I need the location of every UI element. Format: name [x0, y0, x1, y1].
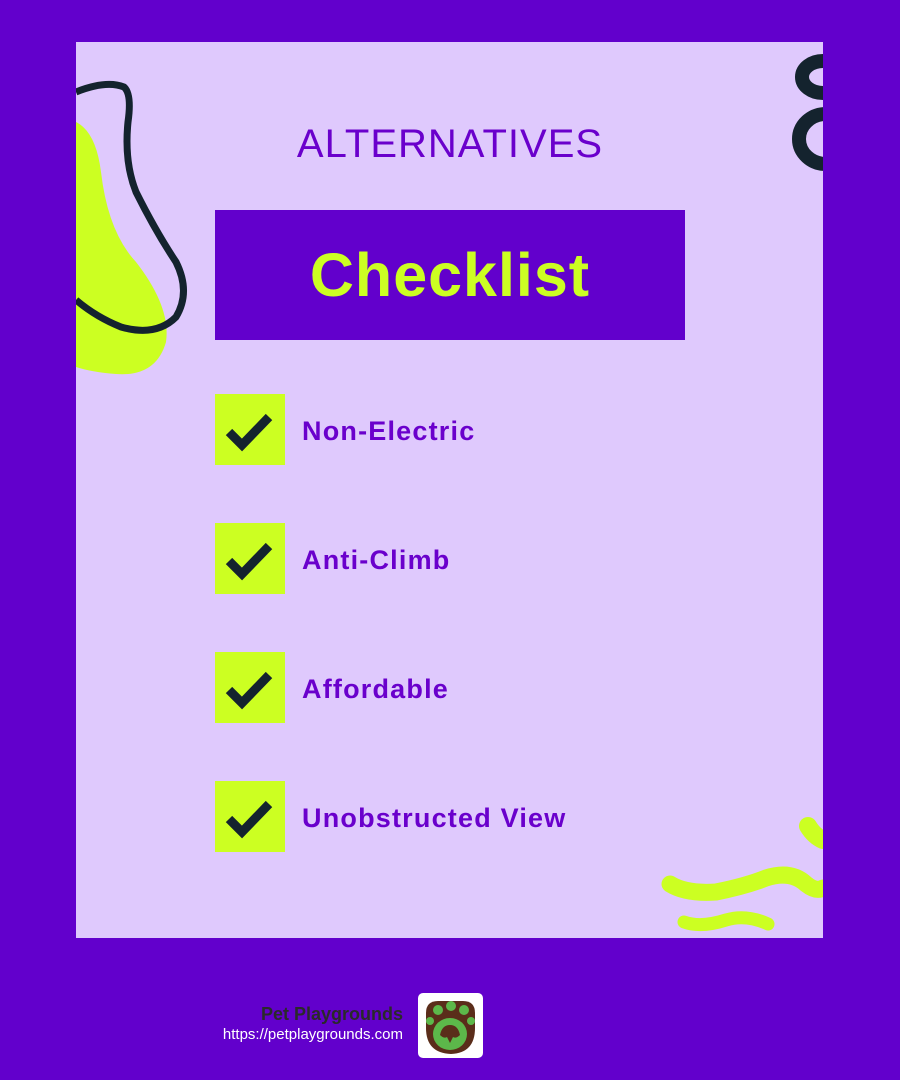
- footer text: [223, 1004, 403, 1043]
- heading banner: [215, 210, 685, 340]
- footer text: https://petplaygrounds.com: [223, 1026, 403, 1043]
- item: Non-Electric: Non-Electric: [302, 416, 475, 446]
- decoration: bottom-right squiggles: [662, 817, 823, 932]
- heading banner: Checklist: [310, 241, 590, 309]
- title: ALTERNATIVES: [297, 122, 603, 166]
- item: Anti-Climb: Anti-Climb: [302, 545, 450, 575]
- panel: main card: [76, 42, 823, 938]
- footer text: Pet Playgrounds: [261, 1004, 403, 1024]
- decoration: top-left blob and loop: [76, 80, 188, 374]
- decoration: top-right rings: [792, 54, 823, 171]
- item: Unobstructed View: [215, 781, 566, 852]
- item: Affordable: Affordable: [302, 674, 449, 704]
- icon: logo paw: [418, 993, 483, 1058]
- item: Affordable: [215, 652, 449, 723]
- item: Anti-Climb: [215, 523, 450, 594]
- item: Non-Electric: [215, 394, 475, 465]
- item: Unobstructed View: Unobstructed View: [302, 803, 566, 833]
